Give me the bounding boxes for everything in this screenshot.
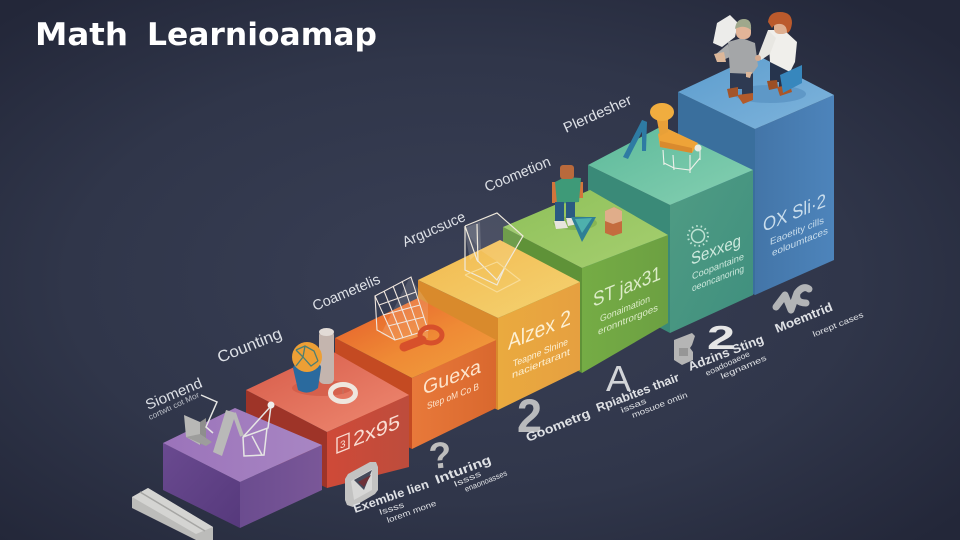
label: Siomend: cortwtı cot Mor	[147, 390, 201, 422]
green face text: Gonaimation	[600, 294, 650, 325]
teal face text: oeoncanoring	[692, 264, 744, 295]
floor captions	[351, 300, 865, 525]
teal face text	[691, 229, 744, 295]
caption: Rpiabites thair: issas	[619, 396, 648, 415]
title: Learnioamap	[147, 17, 377, 53]
icon: A letter and chaise on teal	[623, 103, 702, 173]
icon: grey cube on floor	[674, 333, 695, 365]
green face text: ST jax31	[593, 262, 661, 312]
teal face text: Coopantaine	[692, 251, 744, 283]
icon: grey tray on the floor	[132, 488, 213, 540]
step labels above the stairs	[143, 92, 634, 422]
caption: lorept cases: lorept cases	[811, 310, 865, 339]
step 3: yellow block	[418, 240, 580, 410]
green face text: eronntrorgoes	[598, 303, 658, 338]
caption: Exemble lien: Exemble lien	[351, 477, 431, 516]
icon: numeral 2 on floor: 2	[517, 389, 542, 442]
caption: Goometrg: Goometrg	[524, 406, 592, 445]
label: Coometion: Coometion	[482, 154, 553, 196]
caption: Adzins Sting: legnames	[719, 353, 768, 381]
yellow face text: Teapne Slnine	[513, 337, 568, 370]
yellow face text: Alzex 2	[508, 304, 571, 355]
blue face text	[763, 189, 828, 263]
caption: Inturing: Inturing	[433, 453, 493, 487]
label: Counting: Counting	[215, 325, 285, 367]
step 1: red block	[246, 350, 409, 488]
icon: wire frame on yellow	[463, 213, 523, 292]
orange face text: Step oM Co B	[427, 381, 479, 412]
icon: letter A on floor: A	[606, 358, 631, 399]
caption: Moemtrid: Moemtrid	[773, 300, 835, 336]
icon: question mark on floor: ?	[427, 434, 454, 477]
blue face text: Eaoetity cills	[770, 215, 824, 248]
teal face text: Sexxeg	[691, 230, 741, 269]
figure back: white box	[713, 15, 738, 47]
label: Siomend: Siomend	[143, 376, 205, 414]
title: Math	[35, 17, 128, 53]
caption: Exemble lien	[351, 477, 438, 525]
label: Argucsuce: Argucsuce	[400, 209, 468, 251]
step 2: orange block	[335, 298, 496, 449]
caption: Adzins Sting: eoadooaeoe	[704, 349, 752, 378]
red face text: 3	[340, 439, 346, 452]
label: Plerdesher: Plerdesher	[561, 92, 634, 137]
caption: Rpiabites thair: Rpiabites thair	[594, 370, 682, 415]
caption: Adzins Sting: Adzins Sting	[686, 332, 766, 374]
caption: Inturing	[433, 453, 508, 494]
caption: Inturing: enaonoasses	[463, 469, 508, 494]
step 6: blue block	[678, 55, 834, 295]
caption: Exemble lien: Issss	[378, 500, 405, 517]
orange face text: Guexa	[423, 355, 481, 400]
icon: numeral 2 large: 2	[707, 319, 735, 356]
figure: grey man	[714, 19, 758, 104]
step 0: purple block	[163, 408, 322, 528]
step 4: green block	[503, 190, 668, 373]
blue face text: eoloumtaces	[772, 226, 828, 259]
figure: white shirt man	[755, 12, 802, 96]
caption: Inturing: Issss	[452, 469, 482, 489]
yellow face text: naciertarant	[512, 347, 570, 381]
red face text: 2x95	[353, 410, 400, 451]
step 5: teal block	[588, 126, 753, 333]
icon: figure, triangle and cube on green	[552, 165, 622, 242]
green face text	[593, 262, 661, 340]
icon: two figures on blue	[713, 12, 806, 104]
icon: ball in pot, cylinder and ring on red	[292, 328, 356, 402]
yellow face text	[508, 304, 571, 383]
icon: monitor, letter and wire frame on purple	[184, 395, 274, 456]
caption: Exemble lien: lorem mone	[386, 498, 438, 525]
blue face text: OX Sli·2	[763, 190, 826, 237]
label: Coametelis: Coametelis	[310, 272, 383, 315]
caption: Rpiabites thair: mosuoe ontin	[630, 390, 689, 420]
icon: wave glyph	[776, 288, 809, 310]
red face text	[337, 410, 400, 458]
icon: check box on floor	[345, 462, 378, 507]
icon: wire grid and magnifier on orange	[375, 277, 442, 347]
teal face icon: gear	[688, 226, 708, 246]
